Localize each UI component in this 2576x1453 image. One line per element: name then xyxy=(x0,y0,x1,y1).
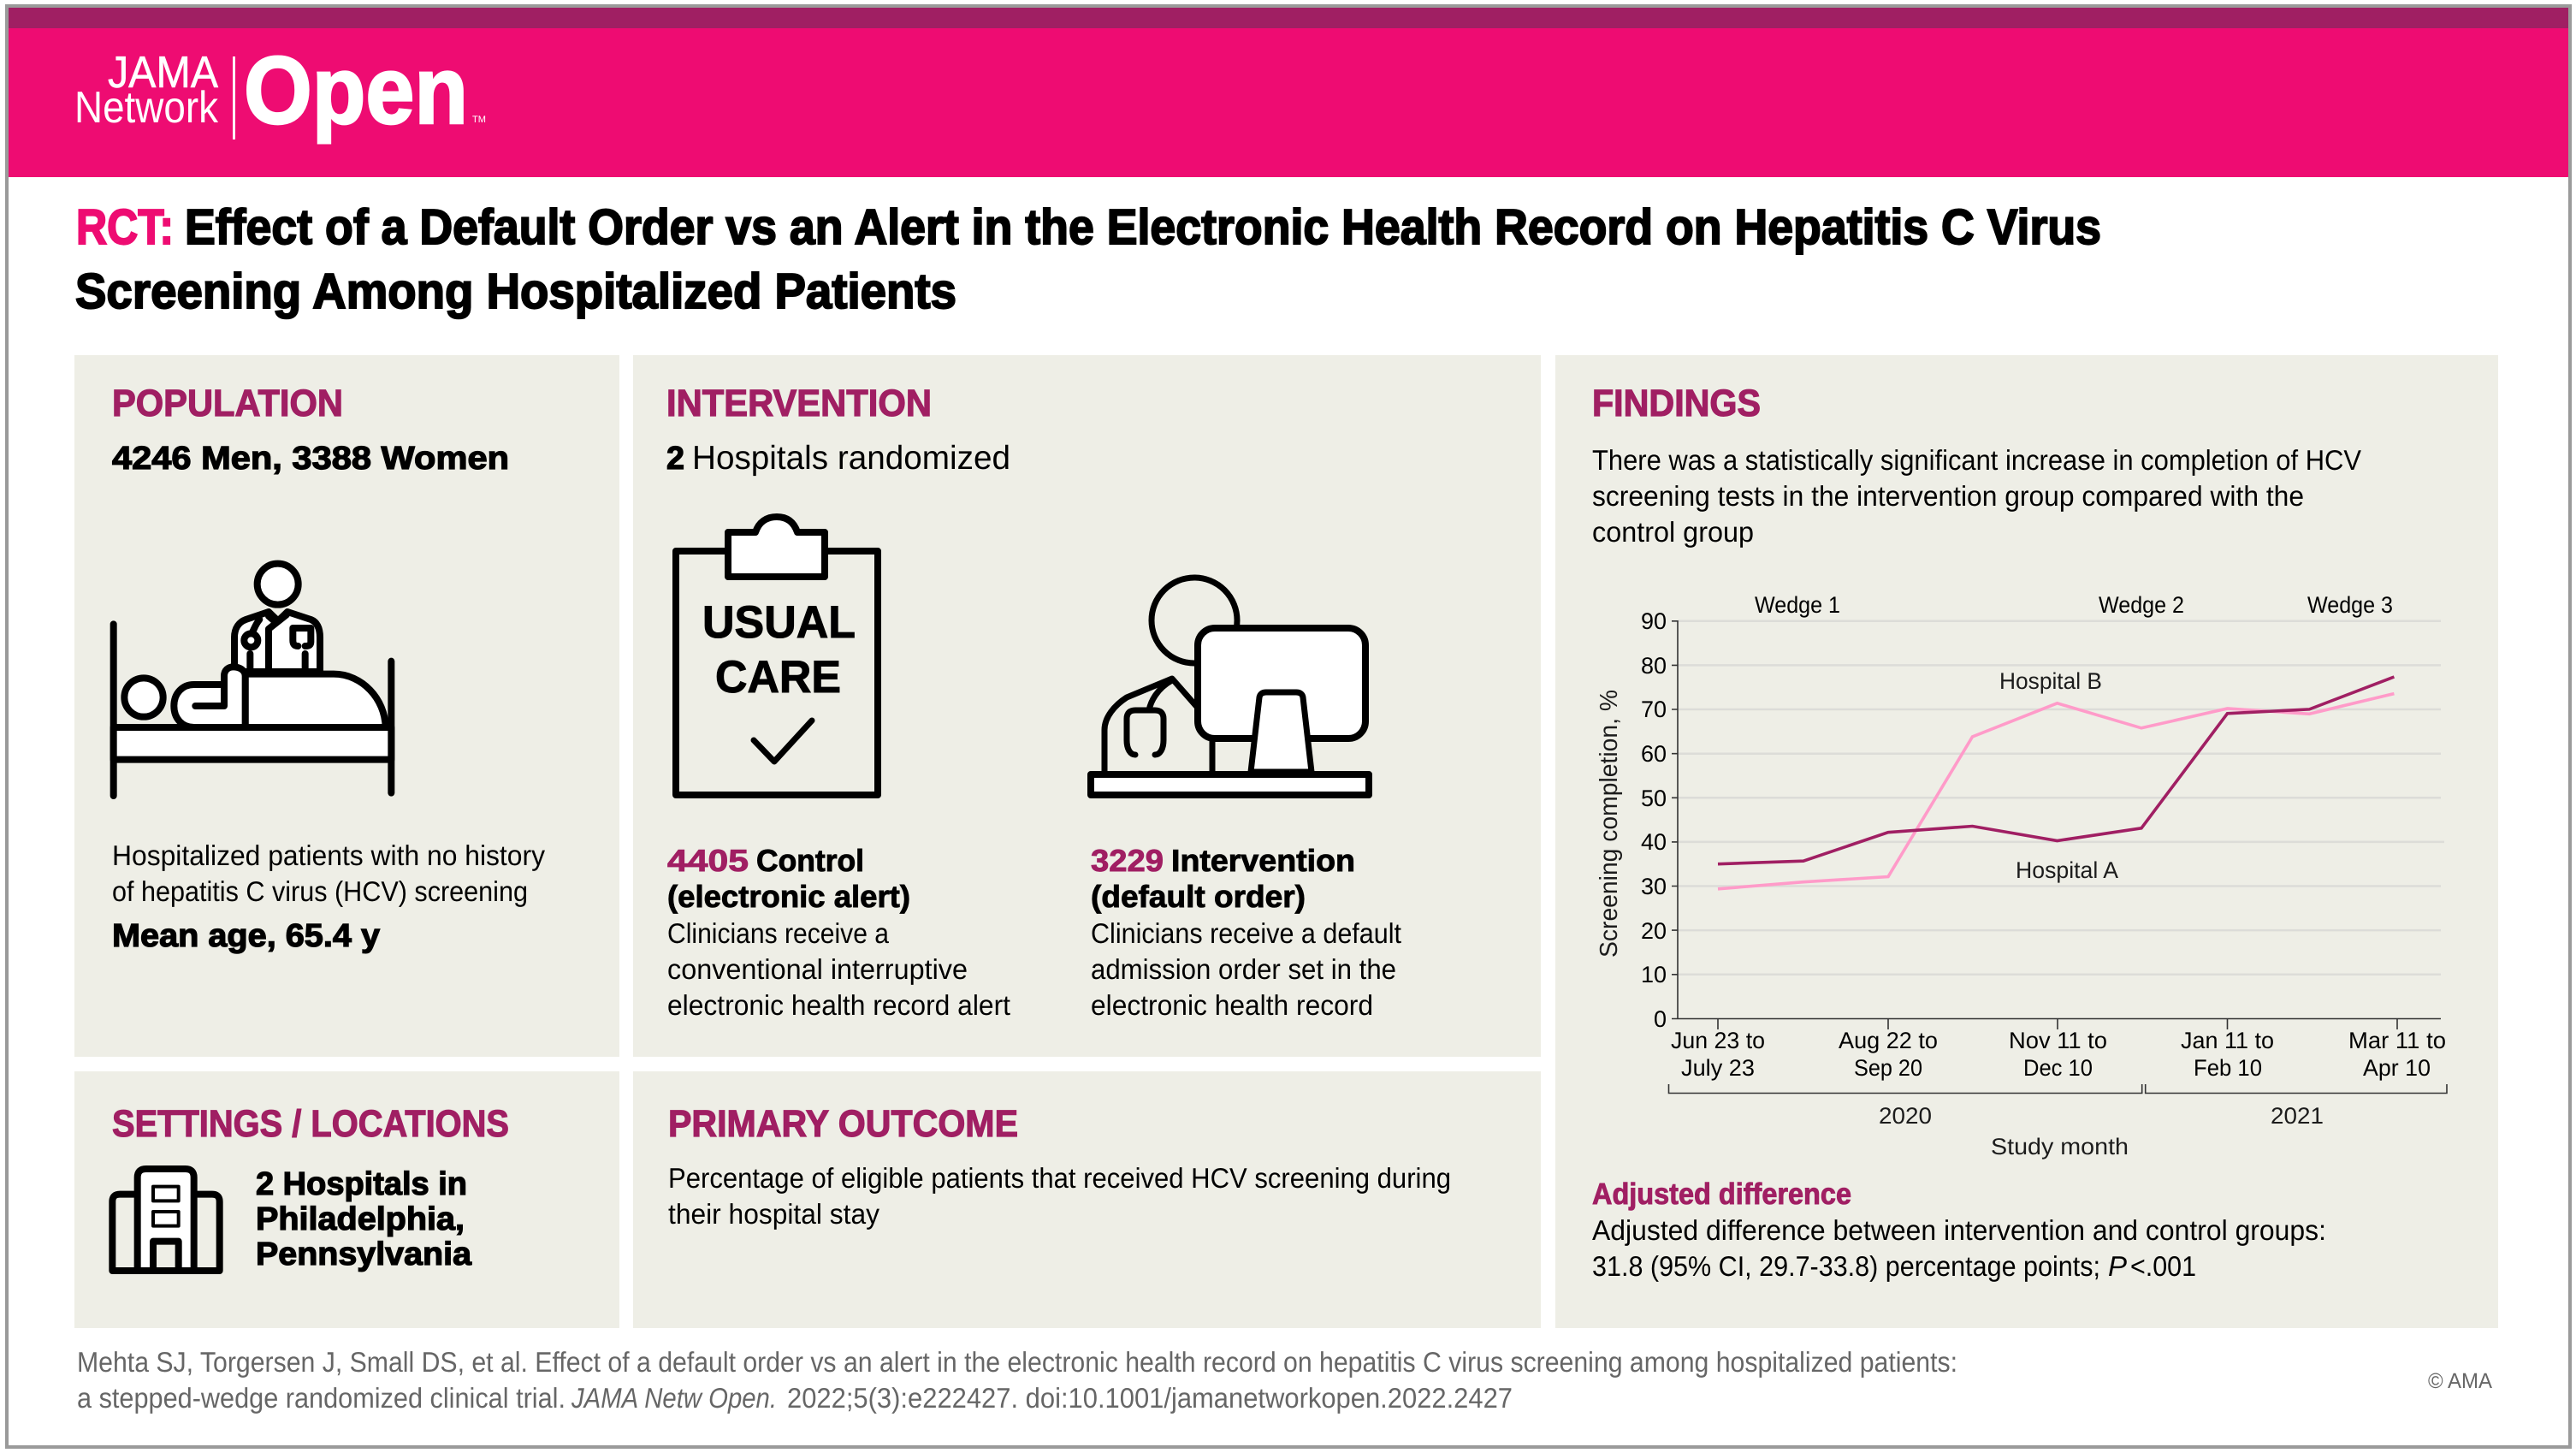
citation xyxy=(77,1346,1957,1414)
citation: 2022;5(3):e222427. doi:10.1001/jamanetworkopen.2022.2427 xyxy=(787,1382,1513,1414)
x axis labels: Nov 11 to xyxy=(2009,1028,2107,1053)
icon: doctor at patient bedside xyxy=(114,564,391,796)
adjusted difference: Adjusted difference between intervention and control groups: xyxy=(1592,1214,2326,1246)
y axis labels: 20 xyxy=(1641,918,1667,944)
x axis labels: Mar 11 to xyxy=(2348,1028,2446,1053)
findings summary: control group xyxy=(1592,516,1754,548)
logo: JAMA Network Open: JAMA xyxy=(108,48,218,98)
adjusted difference xyxy=(1592,1177,2326,1282)
title: Screening Among Hospitalized Patients xyxy=(75,264,956,319)
citation: a stepped-wedge randomized clinical trial. xyxy=(77,1382,566,1414)
population description xyxy=(112,839,545,907)
y axis labels: 40 xyxy=(1641,829,1667,855)
icon: clinician behind computer xyxy=(1091,578,1369,795)
panel: primary outcome xyxy=(633,1071,1541,1328)
logo: JAMA Network Open: TM xyxy=(472,115,486,125)
arm: intervention: Intervention xyxy=(1171,843,1355,878)
x axis labels: Dec 10 xyxy=(2023,1055,2093,1081)
arm: control: (electronic alert) xyxy=(667,879,910,914)
outcome description: their hospital stay xyxy=(668,1198,879,1230)
arm: intervention: electronic health record xyxy=(1091,989,1373,1021)
series label: hospital A: Hospital A xyxy=(2016,857,2118,883)
x axis labels: Aug 22 to xyxy=(1839,1028,1938,1053)
panel: settings and locations xyxy=(74,1071,619,1328)
adjusted difference: P xyxy=(2108,1250,2127,1282)
hospitals randomized: 2 xyxy=(666,441,684,477)
hospitals randomized: Hospitals randomized xyxy=(692,440,1010,477)
title: RCT: xyxy=(76,199,174,255)
x axis labels: Jan 11 to xyxy=(2181,1028,2274,1053)
y axis labels: 80 xyxy=(1641,653,1667,679)
year brackets xyxy=(1668,1084,2447,1129)
hospital locations: Pennsylvania xyxy=(256,1237,472,1272)
x axis labels: Jun 23 to xyxy=(1671,1028,1765,1053)
x axis labels: Feb 10 xyxy=(2194,1055,2262,1081)
y axis labels: 60 xyxy=(1641,741,1667,767)
arm: intervention: admission order set in the xyxy=(1091,953,1396,985)
heading: findings: FINDINGS xyxy=(1592,383,1761,424)
citation: JAMA Netw Open. xyxy=(571,1382,777,1414)
heading: intervention: INTERVENTION xyxy=(666,383,932,424)
series label: hospital B: Hospital B xyxy=(1999,668,2102,694)
x axis title: Study month xyxy=(1991,1134,2129,1159)
arm: control: 4405 xyxy=(667,843,749,878)
y axis labels: 70 xyxy=(1641,697,1667,722)
adjusted difference: <.001 xyxy=(2130,1250,2196,1282)
wedge labels: Wedge 2 xyxy=(2099,592,2184,618)
heading: settings / locations: SETTINGS / LOCATIONS xyxy=(112,1103,509,1145)
heading: primary outcome: PRIMARY OUTCOME xyxy=(668,1103,1018,1145)
panel: intervention xyxy=(633,355,1541,1057)
participant counts: 4246 Men, 3388 Women xyxy=(112,441,509,477)
title: Effect of a Default Order vs an Alert in the Electronic Health Record on Hepatitis C Virus xyxy=(185,199,2101,255)
x axis labels xyxy=(1671,1028,2446,1081)
header banner xyxy=(9,8,2568,177)
wedge labels: Wedge 3 xyxy=(2307,592,2393,618)
arm: control: electronic health record alert xyxy=(667,989,1010,1021)
series: hospital A xyxy=(1718,677,2394,864)
arm: control xyxy=(667,843,1010,1021)
y axis labels: 90 xyxy=(1641,608,1667,634)
y axis labels: 0 xyxy=(1654,1006,1667,1032)
y axis title: Screening completion, % xyxy=(1596,690,1623,958)
outcome description: Percentage of eligible patients that received HCV screening during xyxy=(668,1162,1451,1194)
findings summary: screening tests in the intervention group compared with the xyxy=(1592,480,2304,512)
icon: usual care clipboard xyxy=(676,517,878,795)
findings summary: There was a statistically significant increase in completion of HCV xyxy=(1592,444,2361,476)
arm: intervention: Clinicians receive a default xyxy=(1091,917,1401,949)
icon: usual care clipboard: CARE xyxy=(715,652,841,703)
icon: usual care clipboard: USUAL xyxy=(702,597,856,648)
hospital locations: 2 Hospitals in xyxy=(256,1166,467,1202)
title xyxy=(75,199,2101,319)
year brackets: 2020 xyxy=(1879,1103,1932,1129)
mean age: Mean age, 65.4 y xyxy=(112,918,380,954)
population description: of hepatitis C virus (HCV) screening xyxy=(112,875,528,907)
arm: intervention: 3229 xyxy=(1091,843,1164,878)
copyright: © AMA xyxy=(2428,1369,2492,1393)
y axis labels xyxy=(1641,608,1667,1032)
x axis labels: Sep 20 xyxy=(1854,1055,1922,1081)
x axis labels: July 23 xyxy=(1681,1055,1755,1081)
findings summary xyxy=(1592,444,2361,548)
arm: intervention: (default order) xyxy=(1091,879,1306,914)
y axis labels: 50 xyxy=(1641,786,1667,811)
panel: findings xyxy=(1555,355,2498,1328)
line chart: screening completion by study month xyxy=(1596,592,2447,1159)
arm: control: conventional interruptive xyxy=(667,953,968,985)
x axis labels: Apr 10 xyxy=(2363,1055,2431,1081)
adjusted difference: Adjusted difference xyxy=(1592,1177,1851,1211)
citation: Mehta SJ, Torgersen J, Small DS, et al. Effect of a default order vs an alert in the electronic health record on hepatitis C virus screening among hospitalized patients: xyxy=(77,1346,1957,1378)
wedge labels: Wedge 1 xyxy=(1755,592,1840,618)
adjusted difference: 31.8 (95% CI, 29.7-33.8) percentage points; xyxy=(1592,1250,2100,1282)
y axis labels: 10 xyxy=(1641,962,1667,987)
population description: Hospitalized patients with no history xyxy=(112,839,545,871)
arm: control: Clinicians receive a xyxy=(667,917,890,949)
arm: control: Control xyxy=(756,843,864,878)
hospital locations xyxy=(256,1166,472,1272)
series: hospital B xyxy=(1718,694,2394,889)
logo: JAMA Network Open xyxy=(74,37,486,144)
wedge labels xyxy=(1755,592,2393,618)
arm: intervention xyxy=(1091,843,1401,1021)
heading: population: POPULATION xyxy=(112,383,343,424)
panel: population xyxy=(74,355,619,1057)
logo: JAMA Network Open: Network xyxy=(74,83,219,133)
outcome description xyxy=(668,1162,1451,1230)
year brackets: 2021 xyxy=(2271,1103,2324,1129)
hospital locations: Philadelphia, xyxy=(256,1201,465,1237)
icon: hospital building xyxy=(112,1169,220,1271)
y axis labels: 30 xyxy=(1641,874,1667,899)
logo: JAMA Network Open: Open xyxy=(244,37,468,144)
